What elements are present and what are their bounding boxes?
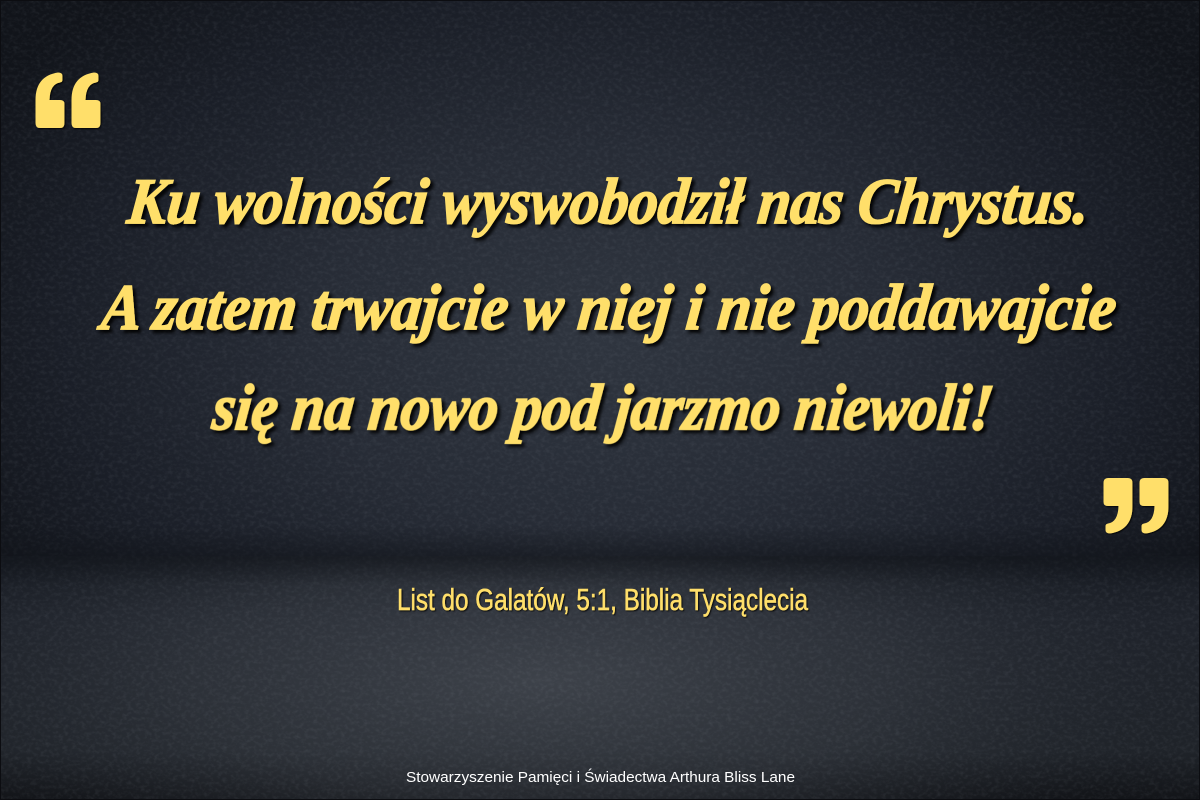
- quote line 2: A zatem trwajcie w niej i nie poddawajcie: [95, 272, 1120, 344]
- quote line 3: się na nowo pod jarzmo niewoli!: [209, 372, 997, 444]
- icon: opening quotation mark: [36, 72, 100, 128]
- quote line 1: Ku wolności wyswobodził nas Chrystus.: [124, 166, 1093, 238]
- quote text: [95, 166, 1120, 444]
- footer organisation name: Stowarzyszenie Pamięci i Świadectwa Arthura Bliss Lane: [406, 768, 795, 786]
- source citation: List do Galatów, 5:1, Biblia Tysiąclecia: [397, 582, 809, 617]
- icon: closing quotation mark: [1104, 478, 1168, 534]
